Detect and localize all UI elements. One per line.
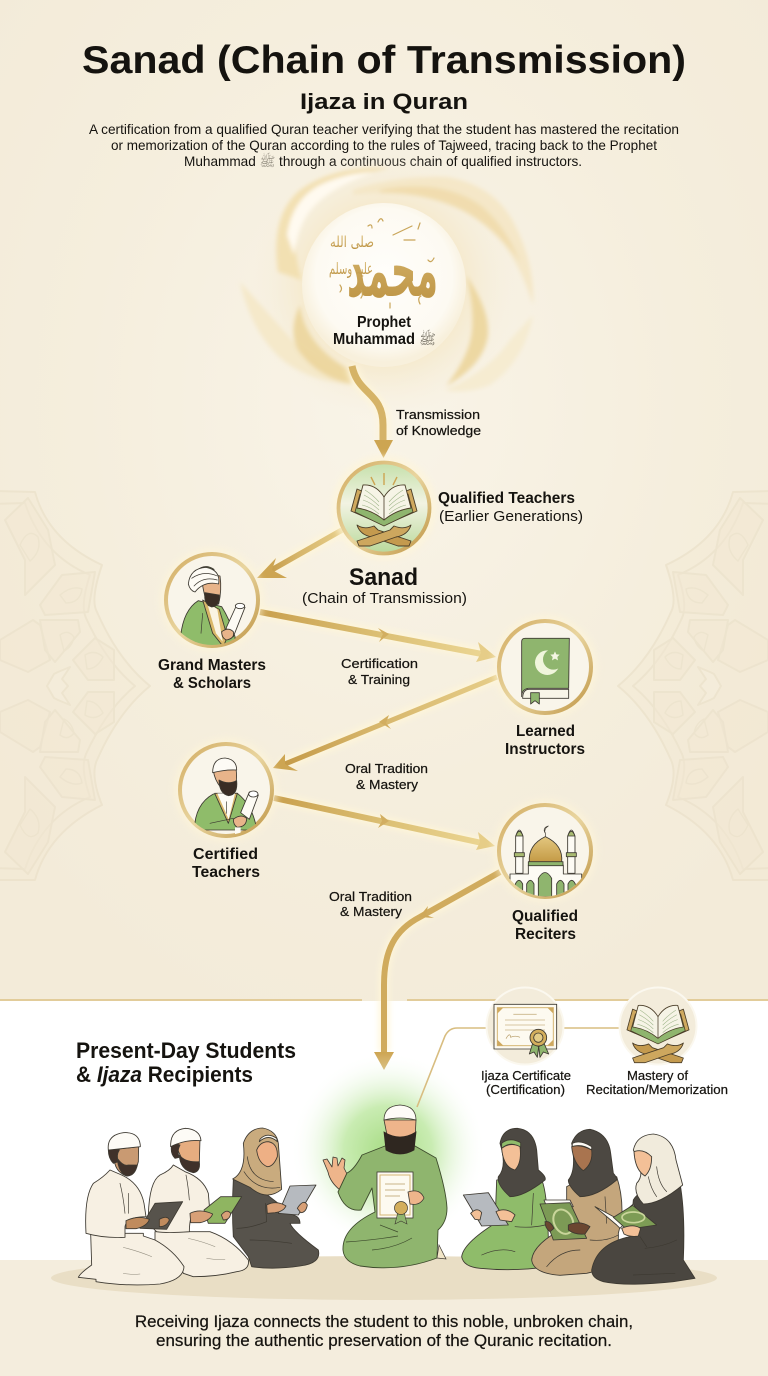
decorative mandala, right: [618, 490, 768, 880]
label: sanad center: (Chain of Transmission): [302, 591, 467, 607]
icon: green book with crescent: [522, 638, 569, 704]
label: oral tradition and mastery, lower: Oral Tradition: [329, 889, 412, 904]
label: learned instructors: Learned: [516, 723, 575, 740]
student 4: woman in green: [462, 1128, 548, 1270]
label: oral tradition and mastery, upper: [345, 761, 428, 792]
label: qualified teachers: [438, 490, 583, 525]
label: mastery of recitation: Mastery of: [627, 1068, 688, 1083]
subtitle: Ijaza in Quran: [300, 89, 468, 114]
calligraphy: صلى الله: [330, 233, 374, 251]
label: certification and training: & Training: [348, 672, 410, 687]
label: sanad center: Sanad: [349, 564, 418, 591]
label: sanad center: [302, 564, 467, 607]
label: oral tradition and mastery, upper: Oral Tradition: [345, 761, 428, 776]
node: qualified teachers, quran on stand: [332, 456, 436, 560]
icon: scholar: [180, 567, 245, 650]
students, right group: [462, 1128, 695, 1284]
label: learned instructors: Instructors: [505, 741, 585, 758]
label: transmission of knowledge: Transmission: [396, 407, 480, 422]
student 3: woman in dark robe and tan hijab: [232, 1128, 319, 1268]
label: mastery of recitation: Recitation/Memorization: [586, 1082, 728, 1097]
arrow: to grand masters: [257, 530, 342, 578]
heading: present-day students: [76, 1038, 296, 1087]
icon: mosque: [510, 826, 582, 903]
description paragraph: Muhammad ﷺ through a continuous chain of qualified instructors.: [184, 152, 582, 169]
label: grand masters: & Scholars: [173, 675, 251, 692]
closing statement: Receiving Ijaza connects the student to this noble, unbroken chain,: [135, 1313, 633, 1331]
golden swirl around prophet circle: [240, 150, 533, 420]
label: ijaza certificate: [481, 1068, 571, 1097]
node: grand masters and scholars: [160, 548, 264, 652]
student 1: man in white: [78, 1133, 184, 1285]
students, left group: [78, 1128, 319, 1285]
label: mastery of recitation: [586, 1068, 728, 1097]
floor band: [0, 1260, 768, 1376]
calligraphy: عليه وسلم: [329, 259, 373, 279]
description paragraph: A certification from a qualified Quran teacher verifying that the student has mastered the recitation: [89, 122, 679, 137]
title: Sanad (Chain of Transmission): [82, 39, 686, 82]
label: grand masters: Grand Masters: [158, 657, 266, 674]
label: certified teachers: Teachers: [192, 864, 260, 881]
label: qualified reciters: Qualified: [512, 908, 578, 925]
section divider: [0, 999, 768, 1001]
label: oral tradition and mastery, upper: & Mastery: [356, 777, 419, 792]
label: ijaza certificate: Ijaza Certificate: [481, 1068, 571, 1083]
student 6: woman in black with cream hijab: [592, 1134, 695, 1284]
label: qualified reciters: [512, 908, 578, 943]
arrow: prophet to qualified teachers: [352, 366, 393, 458]
arrow stem over divider and head: [374, 990, 394, 1070]
icon: quran on stand, small: [620, 988, 696, 1064]
floor shadow ellipse: [51, 1256, 717, 1300]
node: qualified reciters: [493, 799, 597, 903]
label: learned instructors: [505, 723, 585, 758]
node: prophet muhammad: Muhammad: [333, 331, 415, 348]
closing statement: [135, 1313, 633, 1350]
arrow: qualified reciters to present-day students: [384, 872, 500, 1054]
icon: teacher: [194, 758, 258, 837]
description paragraph: or memorization of the Quran according to the rules of Tajweed, tracing back to the Prophet: [111, 138, 657, 153]
student 5: woman in tan: [532, 1129, 622, 1275]
connector line from teacher to certificate and quran: [417, 1028, 620, 1107]
node: prophet muhammad: [302, 203, 466, 367]
description paragraph: [89, 122, 679, 169]
node: prophet muhammad: Prophet: [357, 314, 411, 331]
heading: present-day students: & Ijaza Recipients: [76, 1062, 253, 1087]
calligraphy: [329, 219, 438, 314]
label: oral tradition and mastery, lower: [329, 889, 412, 919]
label: certification and training: Certification: [341, 656, 418, 671]
calligraphy: محمد: [347, 227, 438, 314]
closing statement: ensuring the authentic preservation of the Quranic recitation.: [156, 1332, 612, 1350]
node: learned instructors: [493, 615, 597, 719]
label: ijaza certificate: (Certification): [486, 1082, 565, 1097]
icon: ijaza certificate: [486, 988, 564, 1064]
background: cream upper section: [0, 0, 768, 1001]
label: qualified reciters: Reciters: [515, 926, 576, 943]
arrow: grand masters to learned instructors: [260, 612, 496, 662]
arrow: certified teachers to qualified reciters: [274, 798, 495, 850]
heading: present-day students: Present-Day Students: [76, 1038, 296, 1063]
label: grand masters: [158, 657, 266, 692]
label: transmission of knowledge: [396, 407, 481, 438]
label: certified teachers: Certified: [193, 846, 258, 863]
background: white lower section: [0, 1001, 768, 1376]
label: certified teachers: [192, 846, 260, 881]
node: certified teachers: [174, 738, 278, 842]
label: certification and training: [341, 656, 418, 687]
decorative mandala, left: [0, 490, 150, 880]
label: transmission of knowledge: of Knowledge: [396, 423, 481, 438]
student 2: man in white: [148, 1128, 249, 1277]
label: qualified teachers: Qualified Teachers: [438, 490, 575, 507]
label: oral tradition and mastery, lower: & Mastery: [340, 904, 403, 919]
node: prophet muhammad: ﷺ: [419, 329, 436, 347]
label: qualified teachers: (Earlier Generations): [439, 508, 583, 525]
central teacher holding ijaza: [323, 1105, 447, 1268]
green glow behind central teacher: [290, 1052, 486, 1248]
arrow: learned instructors to certified teachers: [273, 677, 497, 771]
